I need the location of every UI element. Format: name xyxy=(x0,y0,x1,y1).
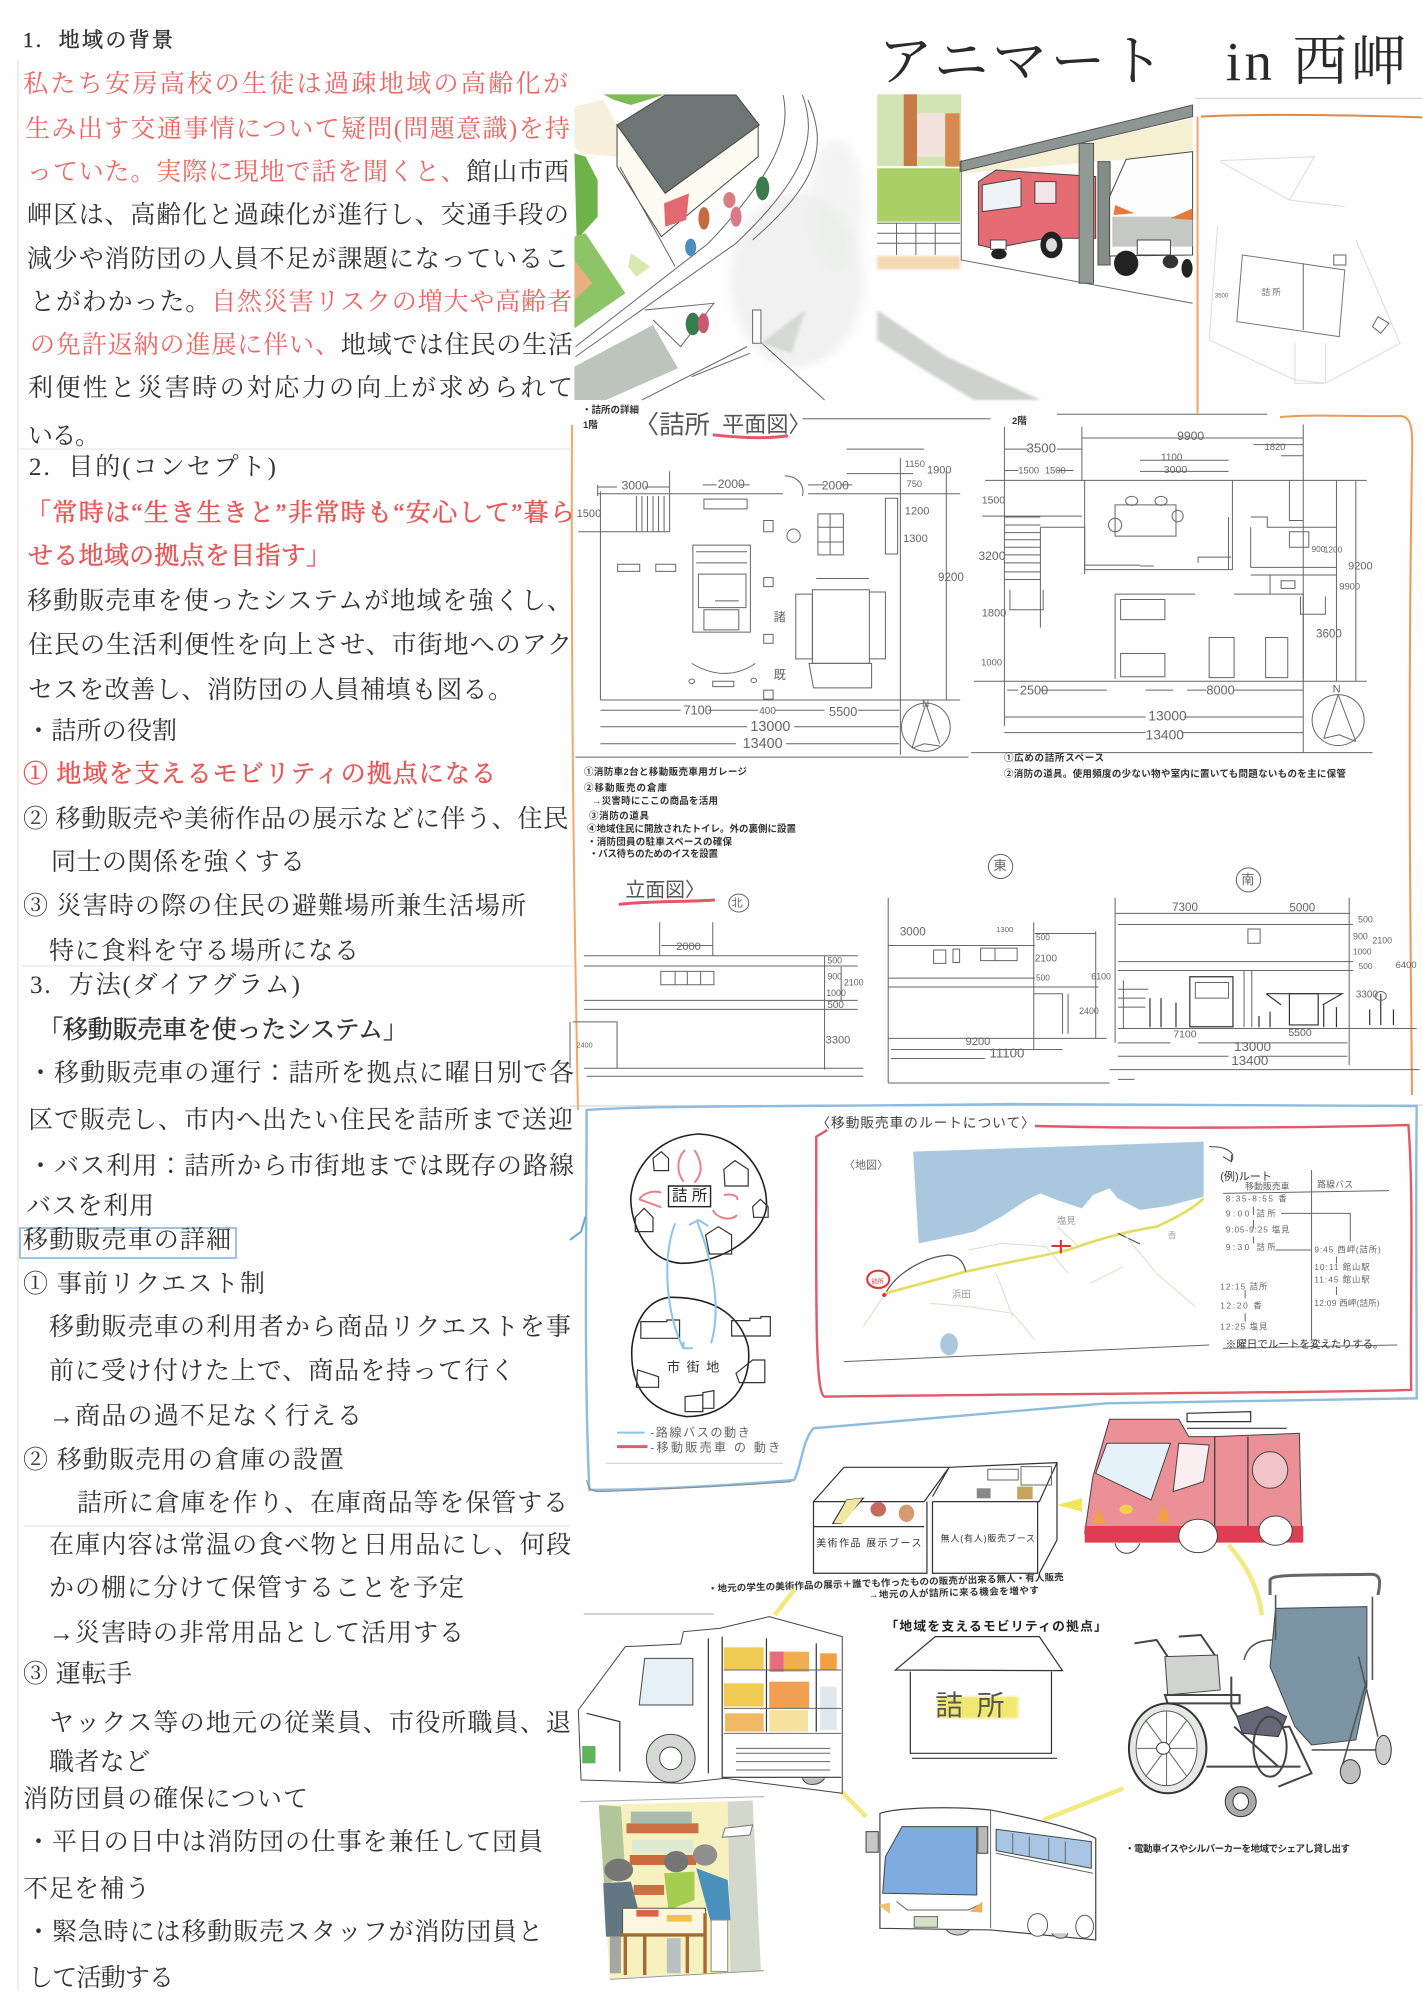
text block: warehouse: →災害時の非常用品として活用する xyxy=(49,1619,464,1647)
panel: route map xyxy=(816,1114,1411,1397)
legend: -移動販売車 の 動き xyxy=(650,1440,780,1455)
diagram: station and city arrows xyxy=(606,1134,783,1463)
elevation: south xyxy=(1110,868,1419,1079)
route timetable: 8:35-8:55 香 xyxy=(1226,1194,1287,1204)
text block: background body: 岬区は、高齢化と過疎化が進行し、交通手段の xyxy=(27,201,569,229)
floor plan: second floor: 9900 xyxy=(1177,429,1204,443)
route timetable: 12:09 西岬(詰所) xyxy=(1314,1298,1380,1308)
floor plan: second floor: 1200 xyxy=(1324,545,1343,555)
illustration: bus xyxy=(866,1808,1096,1940)
elevation: east: 3000 xyxy=(900,926,926,939)
elevation: north xyxy=(570,878,864,1076)
floor plan: first floor: 5500 xyxy=(829,704,857,719)
text block: background body: 利便性と災害時の対応力の向上が求められて xyxy=(28,374,573,402)
captions: station details label: ・詰所の詳細 xyxy=(582,404,639,416)
floor plan: first floor: 7100 xyxy=(683,702,712,717)
captions: first floor notes: →災害時にここの商品を活用 xyxy=(592,795,718,807)
illustration: fire truck xyxy=(1085,1412,1303,1553)
elevation: north: 2100 xyxy=(844,978,864,988)
text block: fire brigade members: 不足を補う xyxy=(23,1875,150,1903)
heading: mobile sales details: 移動販売車の詳細 xyxy=(23,1226,231,1254)
text block: warehouse: ② 移動販売用の倉庫の設置 xyxy=(23,1446,344,1474)
panel: section 3 method xyxy=(20,971,574,1992)
illustration: site plan: 3500 xyxy=(1215,292,1229,299)
elevation: east: 6100 xyxy=(1091,971,1111,981)
elevation: south: 500 xyxy=(1358,914,1373,924)
text block: purpose body xyxy=(27,587,572,704)
floor plan: first floor: 諸 xyxy=(774,609,786,624)
text block: background body: とがわかった。自然災害リスクの増大や高齢者 xyxy=(30,288,572,316)
captions: first floor notes: ②移動販売の倉庫 xyxy=(584,782,667,794)
text block: mobile sales system: ・移動販売車の運行：詰所を拠点に曜日別で各 xyxy=(28,1059,574,1087)
panel: route map: 塩見 xyxy=(1057,1215,1076,1226)
panel: route map: 浜田 xyxy=(952,1288,971,1299)
elevation: east: 11100 xyxy=(989,1046,1024,1061)
floor plan: second floor: 1500 xyxy=(1018,465,1039,476)
elevation: north: 500 xyxy=(827,955,842,965)
text block: fire brigade members: ・緊急時には移動販売スタッフが消防団員と xyxy=(26,1918,543,1946)
floor plan: first floor: 13000 xyxy=(750,719,790,735)
heading: section 1: 1. 地域の背景 xyxy=(23,28,173,52)
text block: mobile sales system: 「移動販売車を使ったシステム」 xyxy=(38,1016,408,1044)
floor plan: second floor: N xyxy=(1333,683,1341,695)
floor plan: first floor: 400 xyxy=(759,706,776,717)
elevation: south: 7100 xyxy=(1173,1028,1197,1040)
text block: warehouse: 詰所に倉庫を作り、在庫商品等を保管する xyxy=(77,1489,568,1517)
floor plan: first floor: 2000 xyxy=(822,478,849,492)
caption: booth note: →地元の人が詰所に来る機会を増やす xyxy=(869,1585,1039,1601)
elevation: north: 900 xyxy=(827,971,842,981)
fire truck xyxy=(978,170,1096,259)
arrows: yellow circulation xyxy=(775,1545,1262,1820)
elevation: east: 500 xyxy=(1036,932,1050,942)
captions: station details label: 2階 xyxy=(1012,415,1027,427)
text block: role of station: 特に食料を守る場所になる xyxy=(49,937,359,965)
illustration: site plan xyxy=(1195,98,1422,413)
legend xyxy=(606,1425,783,1463)
text block: drivers: 職者など xyxy=(49,1748,150,1776)
route timetable: (例)ルート xyxy=(1220,1169,1272,1183)
text block: mobile sales system: 区で販売し、市内へ出たい住民を詰所まで送迎 xyxy=(28,1106,573,1134)
text block: drivers: ヤックス等の地元の従業員、市役所職員、退 xyxy=(49,1709,571,1737)
panel: route map: 香 xyxy=(1168,1230,1177,1240)
floor plan: first floor: 2000 xyxy=(718,477,745,491)
route timetable: 9:45 西岬(詰所) xyxy=(1314,1245,1381,1255)
floor plan: second floor: 1500 xyxy=(1045,465,1066,476)
captions: first floor notes xyxy=(584,766,796,860)
elevation: east xyxy=(888,854,1111,1083)
illustration: booths: 美術作品 展示ブース xyxy=(816,1537,921,1550)
elevation: north: 500 xyxy=(827,1000,844,1011)
captions: first floor notes: ①消防車2台と移動販売車用ガレージ xyxy=(584,766,747,778)
route timetable: 路線バス xyxy=(1317,1178,1353,1189)
elevation: south: 13000 xyxy=(1234,1039,1271,1054)
floor plan: second floor: 1820 xyxy=(1265,441,1285,452)
text block: warehouse: かの棚に分けて保管することを予定 xyxy=(49,1574,464,1602)
text block: request system xyxy=(23,1270,571,1430)
legend: -路線バスの動き xyxy=(650,1425,750,1440)
text block: mobile sales system: バスを利用 xyxy=(26,1192,154,1220)
panel: route map: 〈地図〉 xyxy=(844,1158,888,1171)
circle: station area xyxy=(631,1134,768,1263)
elevation: north: 2400 xyxy=(577,1040,593,1049)
text block: purpose body: 移動販売車を使ったシステムが地域を強くし、 xyxy=(27,587,572,615)
blue bus arrows xyxy=(667,1220,716,1348)
text block: fire brigade members xyxy=(23,1785,543,1992)
captions: second floor notes: ②消防の道具。使用頻度の少ない物や室内に置いても問題ないものを主に保管 xyxy=(1004,768,1346,780)
floor plan: first floor: 平面図〉 xyxy=(722,412,811,437)
text block: concept statement: 「常時は“生き生きと”非常時も“安心して”暮ら xyxy=(26,499,575,527)
route timetable: 移動販売車 xyxy=(1245,1180,1290,1191)
floor plan: first floor: 1500 xyxy=(577,508,601,520)
captions: first floor notes: ・バス待ちのためのイスを設置 xyxy=(589,848,718,860)
floor plan: second floor: 3000 xyxy=(1164,464,1187,476)
panel: section 2 purpose xyxy=(23,453,575,965)
floor plan: first floor: 3000 xyxy=(621,478,649,492)
map: route lines xyxy=(863,1198,1204,1340)
elevation: south: 6400 xyxy=(1396,959,1417,970)
illustration: shop interior xyxy=(580,1797,764,1979)
heading: section 2: 2. 目的(コンセプト) xyxy=(29,453,276,481)
route timetable: 12:25 塩見 xyxy=(1220,1321,1267,1331)
floor plan: second floor: 3500 xyxy=(1027,441,1056,456)
floor plan: second floor: 13000 xyxy=(1148,708,1187,724)
text block: background body: の免許返納の進展に伴い、地域では住民の生活 xyxy=(30,331,573,359)
elevation: south: 13400 xyxy=(1231,1053,1268,1068)
captions: first floor notes: ④地域住民に開放されたトイレ。外の裏側に設置 xyxy=(587,823,796,835)
text block: fire brigade members: して活動する xyxy=(28,1964,174,1992)
illustration: station house xyxy=(885,1619,1107,1758)
elevation: south: 南 xyxy=(1241,872,1255,887)
route timetable: 9:00 詰所 xyxy=(1226,1209,1276,1219)
illustration: aerial street view xyxy=(574,94,863,400)
illustration: mobile sales truck xyxy=(578,1614,842,1793)
white vehicle xyxy=(1110,152,1193,278)
elevation: south: 2100 xyxy=(1372,936,1392,946)
route timetable xyxy=(1209,1147,1397,1350)
pillars xyxy=(1079,143,1110,283)
floor plan: second floor: 1800 xyxy=(982,608,1006,620)
elevation: north: 2000 xyxy=(676,941,701,953)
text block: role of station: 同士の関係を強くする xyxy=(51,848,305,876)
route timetable: 10:11 館山駅 xyxy=(1314,1262,1370,1272)
map: route lines: 詰所 xyxy=(872,1277,884,1285)
arrow: truck to booth xyxy=(1057,1498,1082,1512)
captions: station details label xyxy=(582,404,1027,431)
illustration: station house: 「地域を支えるモビリティの拠点」 xyxy=(885,1619,1107,1634)
floor plan: first floor: 13400 xyxy=(743,736,783,752)
floor plan: second floor: 900 xyxy=(1312,544,1326,554)
map: sea xyxy=(913,1142,1204,1243)
floor plan: second floor: 3200 xyxy=(978,549,1006,563)
text block: request system: 前に受け付けた上で、商品を持って行く xyxy=(49,1357,515,1385)
floor plan: first floor: N xyxy=(922,699,929,710)
route timetable: ※曜日でルートを変えたりする。 xyxy=(1226,1337,1383,1350)
heading: section 3: 3. 方法(ダイアグラム) xyxy=(30,971,300,999)
text block: warehouse xyxy=(23,1446,571,1647)
floor plan: first floor: 1900 xyxy=(927,465,952,477)
floor plan: second floor: 1500 xyxy=(982,495,1005,507)
elevation: east: 9200 xyxy=(966,1036,990,1048)
text block: purpose body: 住民の生活利便性を向上させ、市街地へのアク xyxy=(28,631,572,659)
floor plan: second floor: 9200 xyxy=(1348,561,1373,573)
floor plan: first floor: 〈詰所 xyxy=(634,411,710,439)
floor plan: second floor: 9900 xyxy=(1339,581,1360,592)
floor plan: second floor: 1000 xyxy=(981,657,1002,668)
circle: station area: 詰所 xyxy=(672,1187,707,1205)
text block: background body: 生み出す交通事情について疑問(問題意識)を持 xyxy=(25,115,570,143)
elevation: south: 5000 xyxy=(1289,902,1315,915)
text block: warehouse: 在庫内容は常温の食べ物と日用品にし、何段 xyxy=(49,1531,571,1559)
text block: background body xyxy=(23,70,573,450)
floor plan: second floor: 8000 xyxy=(1206,683,1235,698)
caption: booth note: ・地元の学生の美術作品の展示＋誰でも作ったものの販売が出来る無人・有人販売 xyxy=(708,1571,1064,1595)
captions: second floor notes xyxy=(1004,752,1346,780)
walker xyxy=(1244,1574,1391,1784)
elevation: north: 1000 xyxy=(826,988,846,998)
elevation: south: 1000 xyxy=(1353,946,1372,956)
elevation: south: 900 xyxy=(1353,931,1368,941)
wheelchair xyxy=(1129,1635,1312,1817)
floor plan: second floor: 1100 xyxy=(1161,452,1183,463)
text block: role of station xyxy=(23,717,568,965)
floor plan: second floor: 13400 xyxy=(1146,726,1184,742)
text block: concept statement: せる地域の拠点を目指す」 xyxy=(28,542,331,570)
route timetable: 9:05-9:25 塩見 xyxy=(1226,1225,1289,1235)
text block: drivers xyxy=(23,1660,571,1776)
title: アニマート in 西岬 xyxy=(878,31,1406,92)
elevation: east: 2400 xyxy=(1079,1006,1099,1016)
text block: role of station: ③ 災害時の際の住民の避難場所兼生活場所 xyxy=(23,892,526,920)
captions: station details label: 1階 xyxy=(583,419,598,431)
floor plan: first floor xyxy=(576,411,991,757)
illustration: station house: 詰所 xyxy=(935,1690,1004,1721)
text block: background body: 減少や消防団の人員不足が課題になっているこ xyxy=(27,245,569,273)
panel: diagram frame blue outline xyxy=(570,1104,1417,1492)
text block: request system: →商品の過不足なく行える xyxy=(49,1402,362,1430)
text block: background body: っていた。実際に現地で話を聞くと、館山市西 xyxy=(27,158,569,186)
floor plan: first floor: 750 xyxy=(906,478,922,489)
floor plan: second floor: 2500 xyxy=(1020,683,1048,698)
floor plan: second floor xyxy=(971,414,1373,753)
route timetable: 12:15 詰所 xyxy=(1220,1281,1268,1291)
floor plan: first floor: 9200 xyxy=(938,571,964,584)
route timetable: 12:20 香 xyxy=(1220,1300,1262,1310)
text block: fire brigade members: 消防団員の確保について xyxy=(23,1785,308,1813)
elevation: east: 2100 xyxy=(1035,954,1057,965)
text block: request system: ① 事前リクエスト制 xyxy=(23,1270,265,1298)
floor plan: first floor: 既 xyxy=(774,668,786,682)
circle: city area xyxy=(632,1297,770,1417)
text block: role of station: ・詰所の役割 xyxy=(26,717,177,745)
text block: role of station: ① 地域を支えるモビリティの拠点になる xyxy=(23,760,496,788)
illustration: site plan: 詰 所 xyxy=(1262,287,1281,297)
illustration: booths: 無人(有人)販売ブース xyxy=(941,1533,1035,1544)
captions: first floor notes: ・消防団員の駐車スペースの確保 xyxy=(587,836,732,848)
panel: station drawings frame xyxy=(570,416,1423,1110)
elevation: north: 北 xyxy=(732,897,743,910)
panel: route map: 〈移動販売車のルートについて〉 xyxy=(816,1114,1035,1130)
elevation: east: 東 xyxy=(993,858,1007,873)
elevation: north: 立面図〉 xyxy=(625,878,705,901)
captions: second floor notes: ①広めの詰所スペース xyxy=(1004,752,1104,764)
illustration: garage with fire truck xyxy=(877,94,1193,400)
elevation: south: 3300 xyxy=(1356,989,1378,1000)
floor plan: first floor: 1150 xyxy=(905,458,925,469)
text block: background body: 私たち安房高校の生徒は過疎地域の高齢化が xyxy=(23,70,568,98)
panel: section 1 background xyxy=(23,28,573,450)
text block: fire brigade members: ・平日の日中は消防団の仕事を兼任して団員 xyxy=(26,1828,543,1856)
floor plan: first floor: 1300 xyxy=(903,533,928,545)
route timetable: 11:45 館山駅 xyxy=(1314,1275,1370,1285)
illustration: booths xyxy=(813,1463,1057,1573)
elevation: south: 500 xyxy=(1359,961,1373,971)
text block: mobile sales system xyxy=(26,1016,574,1220)
elevation: east: 1300 xyxy=(996,925,1013,934)
route timetable: 9:30 詰所 xyxy=(1226,1242,1276,1252)
floor plan: second floor: 3600 xyxy=(1316,627,1342,640)
text block: purpose body: セスを改善し、消防団の人員補填も図る。 xyxy=(28,676,513,704)
text block: role of station: ② 移動販売や美術作品の展示などに伴う、住民 xyxy=(23,805,568,833)
caption: wheelchair note: ・電動車イスやシルバーカーを地域でシェアし貸し出す xyxy=(1125,1843,1350,1855)
text block: mobile sales system: ・バス利用：詰所から市街地までは既存の路線 xyxy=(28,1152,574,1180)
elevation: north: 3300 xyxy=(826,1035,850,1047)
text block: concept statement xyxy=(26,499,575,570)
illustration: wheelchair and walker xyxy=(1129,1574,1391,1817)
captions: first floor notes: ③消防の道具 xyxy=(589,810,649,822)
elevation: south: 5500 xyxy=(1288,1027,1312,1039)
circle: city area: 市街地 xyxy=(667,1360,719,1375)
text block: request system: 移動販売車の利用者から商品リクエストを事 xyxy=(49,1313,571,1341)
floor plan: first floor: 1200 xyxy=(905,505,929,517)
text block: background body: いる。 xyxy=(28,423,100,450)
text block: drivers: ③ 運転手 xyxy=(23,1660,132,1688)
elevation: east: 500 xyxy=(1036,972,1050,982)
elevation: south: 7300 xyxy=(1172,901,1198,914)
